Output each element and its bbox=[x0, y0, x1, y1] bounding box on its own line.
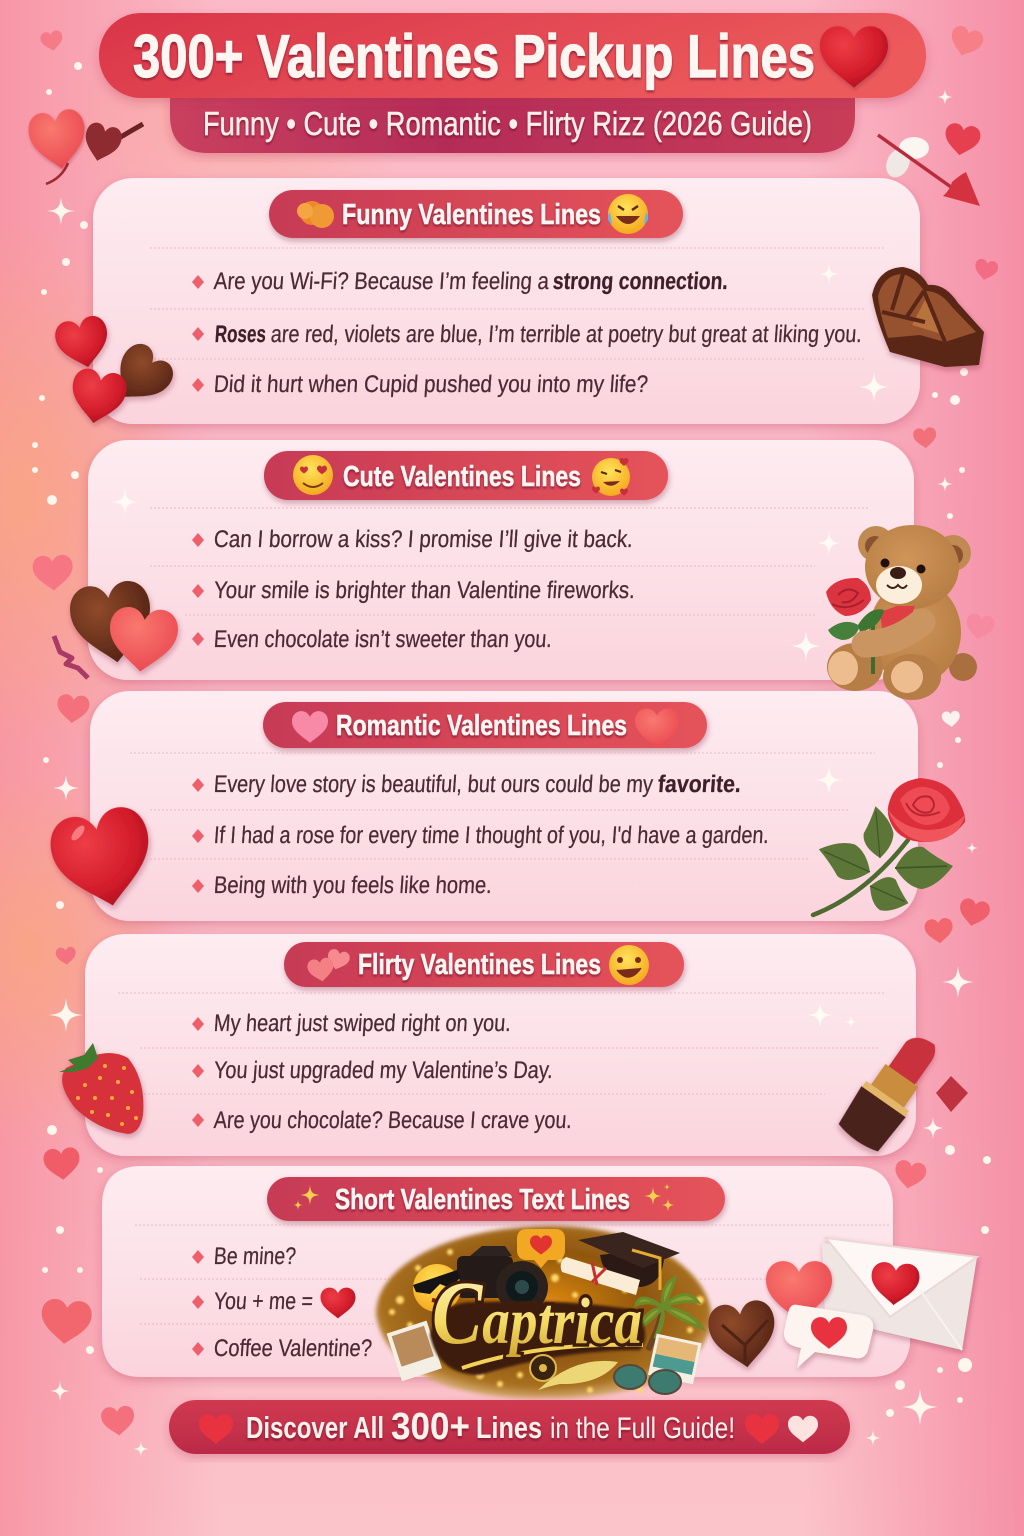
list: flirty lines: Are you chocolate? Because I crave you. bbox=[213, 1107, 573, 1134]
list: romantic lines: favorite. bbox=[657, 771, 742, 798]
list: cute lines: Can I borrow a kiss? I promise I’ll give it back. bbox=[213, 526, 634, 553]
logo photo left bbox=[387, 1321, 442, 1381]
logo palm tree bbox=[636, 1278, 702, 1350]
logo sunglasses bbox=[614, 1365, 681, 1394]
section heading pill: romantic bbox=[263, 702, 707, 748]
list: short lines bbox=[192, 1243, 373, 1362]
list: funny lines: Are you Wi-Fi? Because I’m feeling a bbox=[213, 268, 550, 295]
icon: large glossy red heart bbox=[45, 802, 161, 916]
list: cute lines: Even chocolate isn’t sweeter than you. bbox=[213, 626, 553, 653]
icon: chocolate heart block bbox=[872, 267, 984, 367]
title pill: 300+ Valentines Pickup Lines bbox=[133, 23, 815, 90]
icon: lipstick bbox=[834, 1024, 949, 1156]
list: funny lines bbox=[192, 268, 863, 398]
logo aperture bbox=[530, 1355, 556, 1381]
logo photo right bbox=[648, 1334, 702, 1384]
card sparkle bbox=[815, 766, 843, 794]
panel: cute lines bbox=[88, 440, 914, 680]
list: romantic lines bbox=[192, 771, 770, 899]
icon: rose bbox=[812, 778, 965, 920]
logo dark band behind wordmark bbox=[430, 1301, 645, 1375]
list: romantic lines: Being with you feels like home. bbox=[213, 872, 493, 899]
list: short lines: Be mine? bbox=[213, 1243, 297, 1270]
list: flirty lines bbox=[192, 1010, 573, 1134]
panel: flirty lines bbox=[85, 934, 916, 1156]
title banner bbox=[99, 13, 926, 153]
logo graduation cap bbox=[578, 1232, 680, 1290]
logo sparkle specks bbox=[389, 1249, 704, 1393]
call to action pill: in the Full Guide! bbox=[550, 1412, 735, 1445]
panel: funny lines bbox=[93, 178, 920, 424]
list: short lines: You + me = bbox=[213, 1288, 314, 1315]
icon: speech bubble with heart bbox=[784, 1305, 873, 1368]
list: romantic lines: Every love story is beautiful, but ours could be my bbox=[213, 771, 654, 798]
list: flirty lines: You just upgraded my Valentine’s Day. bbox=[213, 1057, 554, 1084]
icon: coral heart bbox=[766, 1261, 832, 1321]
card sparkles bbox=[112, 489, 841, 661]
call to action pill: Discover All bbox=[246, 1410, 384, 1445]
icon: envelope bbox=[822, 1238, 977, 1350]
list: short lines: Coffee Valentine? bbox=[213, 1335, 373, 1362]
section heading pill: romantic: Romantic Valentines Lines bbox=[336, 710, 627, 742]
section heading pill: flirty bbox=[284, 942, 684, 987]
logo speech bubble heart bbox=[517, 1229, 565, 1268]
panel: short text lines bbox=[102, 1166, 910, 1377]
list: flirty lines: My heart just swiped right on you. bbox=[213, 1010, 512, 1037]
icon: chocolate and coral hearts bbox=[67, 578, 180, 675]
icon: diamond bbox=[936, 1076, 968, 1112]
logo: Captrica badge bbox=[376, 1226, 711, 1398]
icon: hearts and chocolate left of funny panel bbox=[52, 313, 179, 428]
section heading pill: funny bbox=[269, 190, 683, 238]
logo feather bbox=[538, 1361, 618, 1390]
list: cute lines: Your smile is brighter than Valentine fireworks. bbox=[213, 577, 636, 604]
call to action pill bbox=[169, 1400, 850, 1454]
icon: strawberry bbox=[59, 1043, 143, 1134]
icon: small ribbon bbox=[54, 636, 88, 678]
card sparkles bbox=[807, 1002, 857, 1028]
list: funny lines: strong connection. bbox=[552, 268, 729, 295]
logo wordmark: Captrica bbox=[432, 1264, 642, 1363]
section heading pill: short: Short Valentines Text Lines bbox=[335, 1184, 630, 1216]
logo camera bbox=[457, 1246, 548, 1313]
call to action pill: 300+ bbox=[391, 1406, 470, 1448]
section heading pill: cute: Cute Valentines Lines bbox=[343, 461, 581, 493]
list: funny lines: Did it hurt when Cupid pushed you into my life? bbox=[213, 371, 649, 398]
list: funny lines: are red, violets are blue, I’m terrible at poetry but great at liking you. bbox=[270, 321, 863, 348]
logo diploma bbox=[561, 1257, 640, 1295]
card sparkles: funny panel bbox=[819, 264, 889, 402]
section heading pill: flirty: Flirty Valentines Lines bbox=[358, 949, 601, 981]
call to action pill: Lines bbox=[476, 1410, 542, 1445]
section heading pill: cute bbox=[264, 451, 668, 500]
list: cute lines bbox=[192, 526, 636, 653]
icon: teddy bear with rose bbox=[826, 525, 977, 700]
section heading pill: short bbox=[267, 1177, 725, 1221]
subtitle pill bbox=[170, 92, 855, 153]
list: romantic lines: If I had a rose for every time I thought of you, I'd have a garden. bbox=[213, 822, 770, 849]
list: funny lines: Roses bbox=[214, 321, 267, 348]
logo emoji with sunglasses bbox=[413, 1264, 461, 1312]
panel: romantic lines bbox=[90, 691, 918, 921]
icon: chocolate heart bbox=[706, 1298, 780, 1372]
icon: arrow with feather bbox=[878, 135, 980, 206]
icon: heart with cupid arrow bbox=[26, 107, 143, 184]
subtitle pill: Funny • Cute • Romantic • Flirty Rizz (2026 Guide) bbox=[203, 105, 812, 142]
section heading pill: funny: Funny Valentines Lines bbox=[342, 199, 601, 231]
icon: title heart bbox=[820, 26, 888, 88]
icon: inline heart bbox=[320, 1288, 356, 1318]
